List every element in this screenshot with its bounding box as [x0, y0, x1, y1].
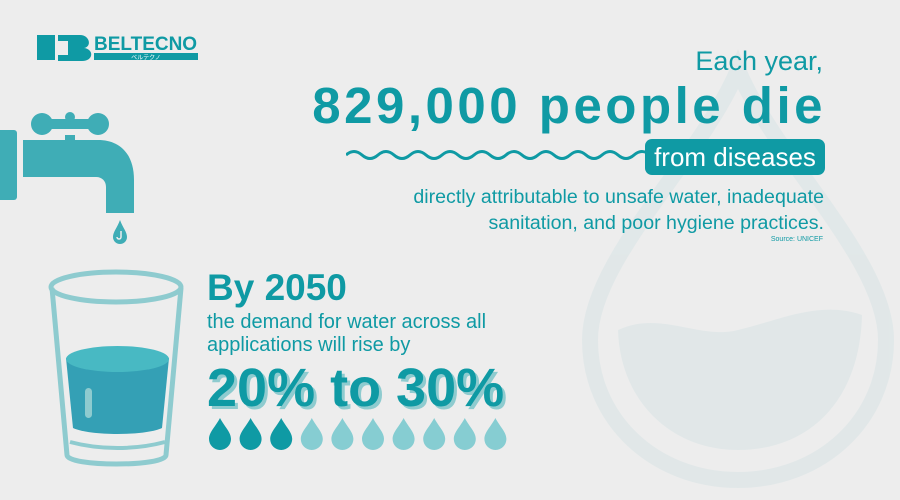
icon: glass of water: [48, 270, 184, 466]
text block: demand: the demand for water across all: [207, 311, 486, 333]
stat: 20% to 30%: 20% to 30%: [207, 358, 504, 418]
source: Source: UNICEF: [771, 236, 823, 243]
logo: BELTECNO: [94, 34, 197, 55]
logo: [37, 34, 198, 62]
text block: demand: [207, 311, 486, 356]
icon: faucet: [0, 112, 134, 244]
heading: each year: Each year,: [695, 46, 823, 76]
text block: description: [413, 186, 824, 234]
heading: 829,000 people die: 829,000 people die: [312, 77, 826, 134]
wave line: [346, 150, 645, 160]
label: from diseases: from diseases: [654, 142, 816, 172]
text block: description: directly attributable to unsafe water, inadequate: [413, 186, 824, 208]
drops row: [209, 418, 506, 450]
heading: by 2050: By 2050: [207, 267, 347, 308]
logo: ベルテクノ: [131, 52, 161, 62]
text block: demand: applications will rise by: [207, 334, 410, 356]
text block: description: sanitation, and poor hygiene practices.: [488, 212, 824, 234]
